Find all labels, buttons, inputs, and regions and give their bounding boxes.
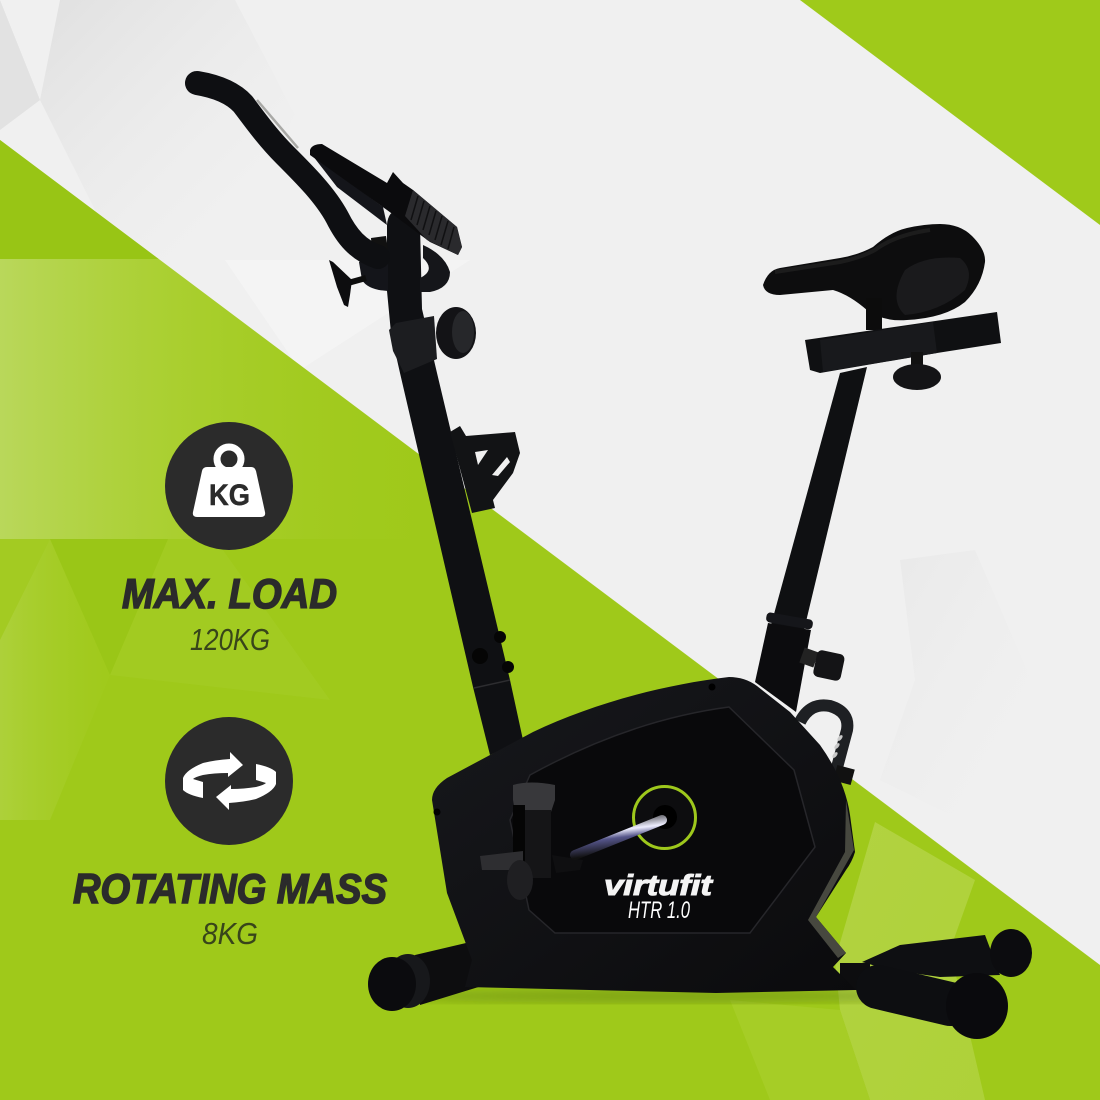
background: green top-right corner — [800, 0, 1100, 225]
model: HTR 1.0: HTR 1.0 — [628, 897, 690, 924]
base feet — [368, 929, 1032, 1039]
icon: weight KG badge — [165, 422, 293, 550]
column clamp and knob — [389, 307, 476, 373]
main flywheel housing — [432, 677, 856, 993]
icon: rotating arrows badge — [165, 717, 293, 845]
resistance strap — [800, 705, 855, 785]
icon: weight KG badge: KG — [209, 479, 250, 512]
console — [310, 144, 462, 255]
seat post — [755, 367, 867, 712]
value: 8KG: 8KG — [202, 916, 258, 951]
logo: virtufit: virtufit — [604, 870, 714, 902]
crank hub ring — [634, 786, 696, 848]
handlebar column — [387, 210, 523, 755]
seat clamp and knob — [805, 312, 1001, 390]
handlebar — [197, 83, 387, 257]
crank arm — [552, 820, 662, 873]
heading: MAX. LOAD: MAX. LOAD — [122, 570, 337, 617]
bottle holder — [450, 426, 520, 513]
heading: ROTATING MASS: ROTATING MASS — [73, 865, 387, 912]
saddle — [763, 224, 985, 330]
floor shadow — [390, 989, 930, 1003]
rear loop and adjust knob — [329, 236, 450, 307]
value: 120KG: 120KG — [190, 622, 270, 657]
pedal — [480, 782, 555, 900]
exercise bike — [197, 83, 1032, 1039]
